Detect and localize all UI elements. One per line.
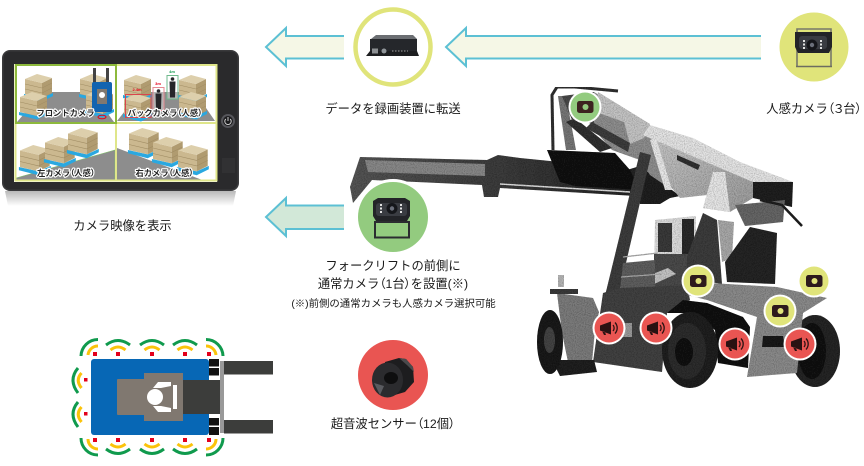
quadrant frames <box>16 65 216 181</box>
view: right camera <box>117 128 209 181</box>
counterweight <box>557 293 599 362</box>
panel: tablet monitor <box>2 50 239 206</box>
chassis <box>593 285 690 372</box>
caption: human-detecting camera: 人感カメラ（３台） <box>766 101 862 116</box>
marker: camera 1 <box>682 264 714 298</box>
caption: normal camera: (※)前側の通常カメラも人感カメラ選択可能 <box>291 297 496 310</box>
mast <box>220 361 224 433</box>
rear wheel <box>537 310 597 376</box>
icon: normal camera <box>355 179 431 255</box>
caption: normal camera: 通常カメラ（1台）を設置(※) <box>318 276 468 291</box>
view: back camera: 4m <box>169 69 175 74</box>
marker: sensor 2 <box>640 312 672 344</box>
rear support <box>725 227 777 284</box>
view: back camera: 3m <box>155 81 161 86</box>
icon: ultrasonic sensor <box>358 340 428 410</box>
front wheels <box>209 359 219 435</box>
person silhouettes <box>156 77 176 109</box>
inner yellow arcs <box>78 346 216 449</box>
label: フロントカメラ <box>36 108 95 118</box>
mast base <box>183 380 220 414</box>
wheel arch <box>667 300 750 368</box>
main boom top <box>643 125 793 182</box>
hoses <box>735 200 802 226</box>
marker: top camera <box>568 90 602 124</box>
marker: sensor 3 <box>718 328 752 360</box>
speaker grille <box>222 158 235 173</box>
driver seat <box>147 382 177 412</box>
caption: tablet: カメラ映像を表示 <box>73 219 172 233</box>
front deck <box>687 283 827 377</box>
diagram: forklift top view with sensors <box>73 340 273 455</box>
forklift on screen <box>92 68 112 119</box>
lift cylinder <box>603 152 651 306</box>
tablet reflection <box>5 191 236 206</box>
body <box>91 359 209 435</box>
distance labels: 2.4m <box>132 87 142 92</box>
view: left camera <box>16 128 115 181</box>
illustration: reach stacker forklift <box>350 87 840 388</box>
far wheel <box>790 315 840 387</box>
arrow: normal camera to tablet <box>266 198 344 236</box>
boom end face <box>753 182 793 207</box>
recorder device <box>366 35 419 56</box>
railing and box <box>620 253 662 290</box>
marker: sensor 4 <box>784 328 816 360</box>
label: 左カメラ（人感） <box>37 168 95 178</box>
front wheel <box>662 312 718 388</box>
boom upper arm <box>596 92 650 144</box>
power button <box>221 114 235 128</box>
outer green arcs <box>73 340 223 455</box>
caption: recorder: データを録画装置に転送 <box>325 101 461 116</box>
arrow: recorder to tablet <box>266 28 344 66</box>
front arm <box>687 213 722 284</box>
marker: sensor 1 <box>592 312 626 344</box>
boom head frame <box>552 87 618 152</box>
view: front camera <box>17 68 114 122</box>
counterweight and cab <box>117 373 183 421</box>
cab <box>650 216 696 288</box>
icon: human-detecting camera <box>780 12 848 82</box>
spreader beam <box>350 155 680 204</box>
icon: recorder ring <box>356 10 430 84</box>
side panel by column <box>718 220 734 262</box>
boom mount <box>547 150 640 190</box>
label: 右カメラ（人感） <box>135 168 194 178</box>
caption: ultrasonic sensor: 超音波センサー（12個） <box>331 416 455 431</box>
main boom side <box>643 135 753 212</box>
caption: normal camera: フォークリフトの前側に <box>325 258 461 273</box>
marker: camera 3 <box>764 294 796 328</box>
tablet body <box>2 50 239 191</box>
caption: normal camera <box>291 258 496 310</box>
distance frames <box>126 94 151 118</box>
sensor dots <box>84 352 211 442</box>
marker: camera 2 <box>798 264 830 298</box>
forks <box>224 361 273 434</box>
view: back camera <box>117 69 215 122</box>
arrow: camera to recorder <box>446 28 761 66</box>
screen <box>14 64 217 182</box>
label: バックカメラ（人感） <box>128 108 202 118</box>
boom backing <box>590 92 672 190</box>
